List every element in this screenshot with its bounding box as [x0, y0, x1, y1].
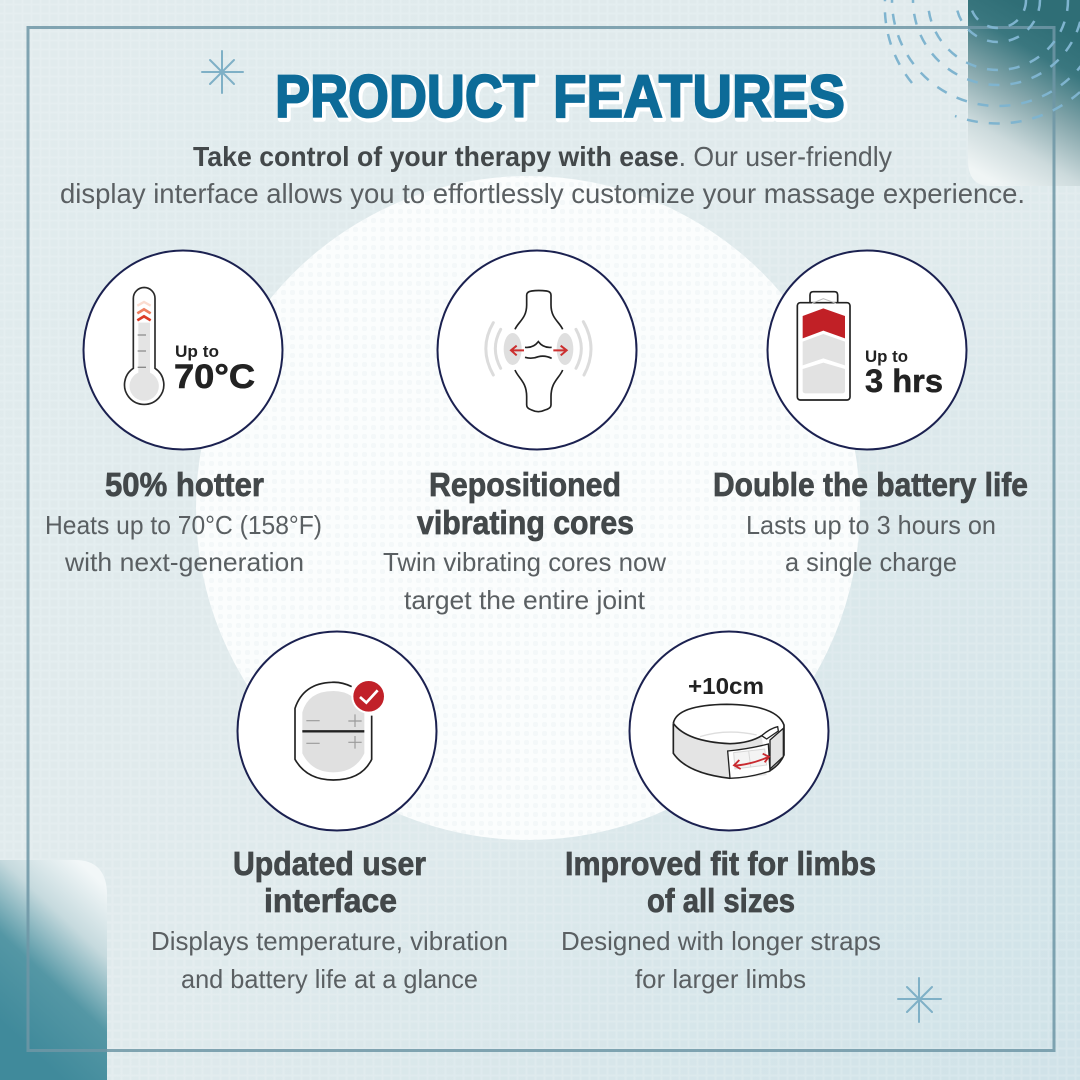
- description: with next-generation: [64, 547, 304, 577]
- intro text: [60, 141, 1025, 209]
- title: FEATURES: [555, 65, 847, 132]
- icon: display panel: [238, 632, 436, 830]
- description: for larger limbs: [635, 964, 806, 994]
- description: Lasts up to 3 hours on: [746, 510, 996, 540]
- badge text: 3 hrs: [865, 363, 943, 399]
- heading: [417, 466, 634, 541]
- title: [275, 63, 847, 132]
- heading: of all sizes: [647, 882, 795, 919]
- badge text: [174, 342, 255, 396]
- description: [151, 926, 508, 994]
- description: target the entire joint: [404, 585, 646, 615]
- heading: interface: [264, 882, 397, 919]
- intro text: display interface allows you to effortlessly customize your massage experience.: [60, 178, 1025, 209]
- feature: improved fit: [561, 632, 881, 994]
- badge text: Up to: [175, 342, 219, 361]
- title: FEATURES: [553, 63, 845, 130]
- icon: strap: [630, 632, 828, 830]
- intro text: Take control of your therapy with ease. Our user-friendly: [193, 141, 892, 172]
- icon: thermometer badge: [84, 250, 282, 450]
- heading: Improved fit for limbs: [565, 845, 876, 882]
- heading: 50% hotter: [105, 466, 264, 503]
- description: [383, 547, 666, 615]
- description: a single charge: [785, 547, 957, 577]
- description: Twin vibrating cores now: [383, 547, 666, 577]
- dashed concentric arcs: [885, 0, 1080, 123]
- heading: Repositioned: [429, 466, 621, 503]
- badge text: Up to: [865, 347, 908, 366]
- feature: 50% hotter: [45, 250, 322, 577]
- icon: battery badge: [768, 250, 966, 450]
- heading: [233, 845, 426, 919]
- sparkle top left: [202, 51, 243, 93]
- badge text: [865, 347, 943, 399]
- description: [45, 510, 322, 577]
- heading: [565, 845, 876, 919]
- large white circle: [196, 176, 860, 840]
- heading: vibrating cores: [417, 504, 634, 541]
- feature: user interface: [151, 632, 508, 994]
- badge text: 70°C: [174, 358, 255, 396]
- title: PRODUCT: [275, 63, 535, 130]
- sparkle bottom right: [898, 978, 941, 1022]
- feature: repositioned cores: [383, 250, 666, 615]
- label +10cm: +10cm: [688, 673, 764, 699]
- heading: Double the battery life: [713, 466, 1028, 503]
- description: and battery life at a glance: [181, 964, 478, 994]
- heading: Updated user: [233, 845, 426, 882]
- description: Designed with longer straps: [561, 926, 881, 956]
- feature: battery: [713, 250, 1028, 577]
- description: Displays temperature, vibration: [151, 926, 508, 956]
- bottom left corner gradient: [0, 860, 107, 1080]
- description: [561, 926, 881, 994]
- title: PRODUCT: [277, 65, 537, 132]
- description: Heats up to 70°C (158°F): [45, 510, 322, 540]
- top right corner gradient: [968, 0, 1080, 186]
- description: [746, 510, 996, 577]
- icon: knee joint: [438, 250, 636, 450]
